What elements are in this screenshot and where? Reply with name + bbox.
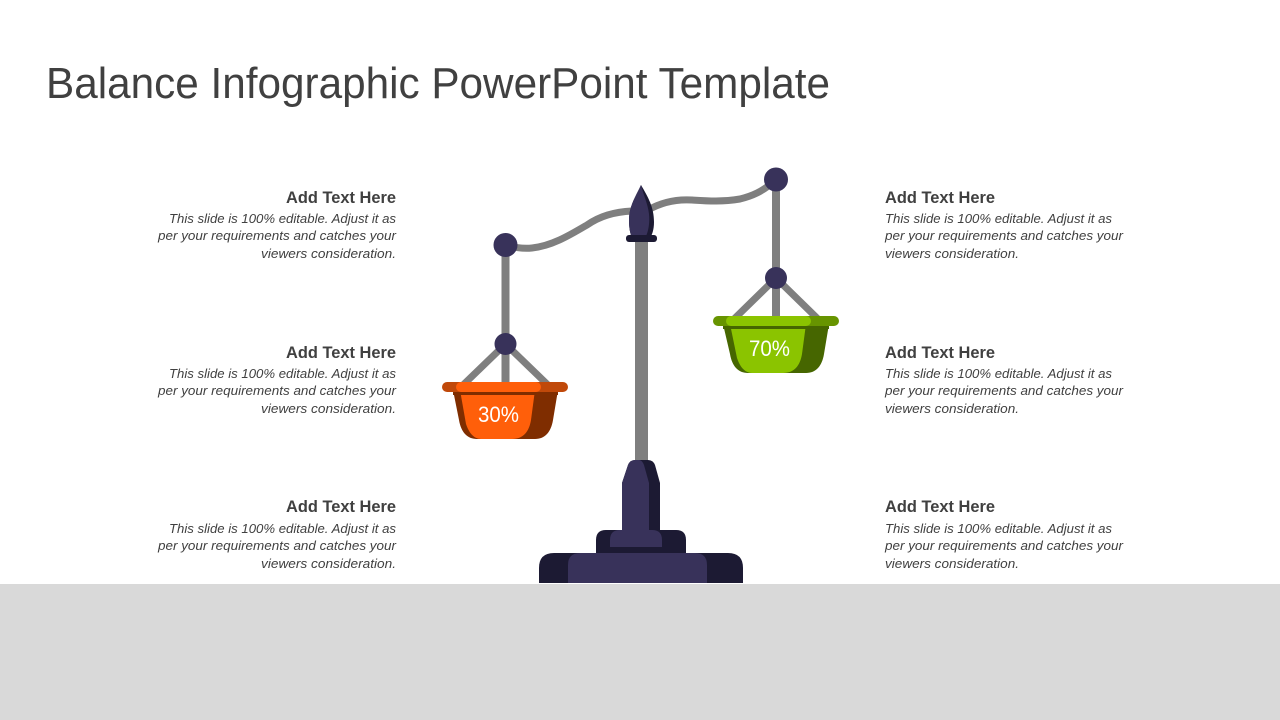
left hanger [462, 233, 549, 386]
left text block 2: Add Text Here [286, 343, 396, 362]
right text block 2: Add Text Here [885, 343, 995, 362]
right text block 3 [884, 497, 1124, 571]
center post [635, 240, 648, 462]
left text block 2: This slide is 100% editable. Adjust it as [169, 366, 396, 381]
left text block 3: viewers consideration. [261, 556, 396, 571]
left text block 3: Add Text Here [286, 497, 396, 516]
left text block 2: per your requirements and catches your [157, 383, 397, 398]
left text block 1: Add Text Here [286, 188, 396, 207]
right text block 2: per your requirements and catches your [884, 383, 1124, 398]
right text block 2: viewers consideration. [885, 401, 1019, 416]
right text block 1 [884, 188, 1124, 261]
left text block 2 [157, 343, 397, 416]
scale stand [539, 460, 743, 583]
label: 30%: 30% [478, 402, 519, 427]
right text block 1: per your requirements and catches your [884, 228, 1124, 243]
right text block 2: This slide is 100% editable. Adjust it as [885, 366, 1112, 381]
left text block 1 [157, 188, 397, 261]
balance scale [442, 168, 839, 583]
right text block 2 [884, 343, 1124, 416]
right text block 3: per your requirements and catches your [884, 538, 1124, 553]
scale beam [505, 180, 776, 248]
right text block 3: viewers consideration. [885, 556, 1019, 571]
left text block 1: per your requirements and catches your [157, 228, 397, 243]
left basket: orange 30% [442, 382, 568, 439]
right hanger [733, 168, 819, 320]
finial [626, 185, 657, 242]
left text block 1: This slide is 100% editable. Adjust it as [169, 211, 396, 226]
right text block 1: Add Text Here [885, 188, 995, 207]
right text block 1: This slide is 100% editable. Adjust it as [885, 211, 1112, 226]
footer band [0, 584, 1280, 720]
right basket: green 70% [713, 316, 839, 373]
left text block 1: viewers consideration. [261, 246, 396, 261]
right text block 1: viewers consideration. [885, 246, 1019, 261]
right text block 3: This slide is 100% editable. Adjust it as [885, 521, 1112, 536]
left text block 2: viewers consideration. [261, 401, 396, 416]
label: 70%: 70% [749, 336, 790, 361]
left text block 3: per your requirements and catches your [157, 538, 397, 553]
right text block 3: Add Text Here [885, 497, 995, 516]
left text block 3: This slide is 100% editable. Adjust it as [169, 521, 396, 536]
title: Balance Infographic PowerPoint Template [46, 59, 830, 108]
left text block 3 [157, 497, 397, 571]
